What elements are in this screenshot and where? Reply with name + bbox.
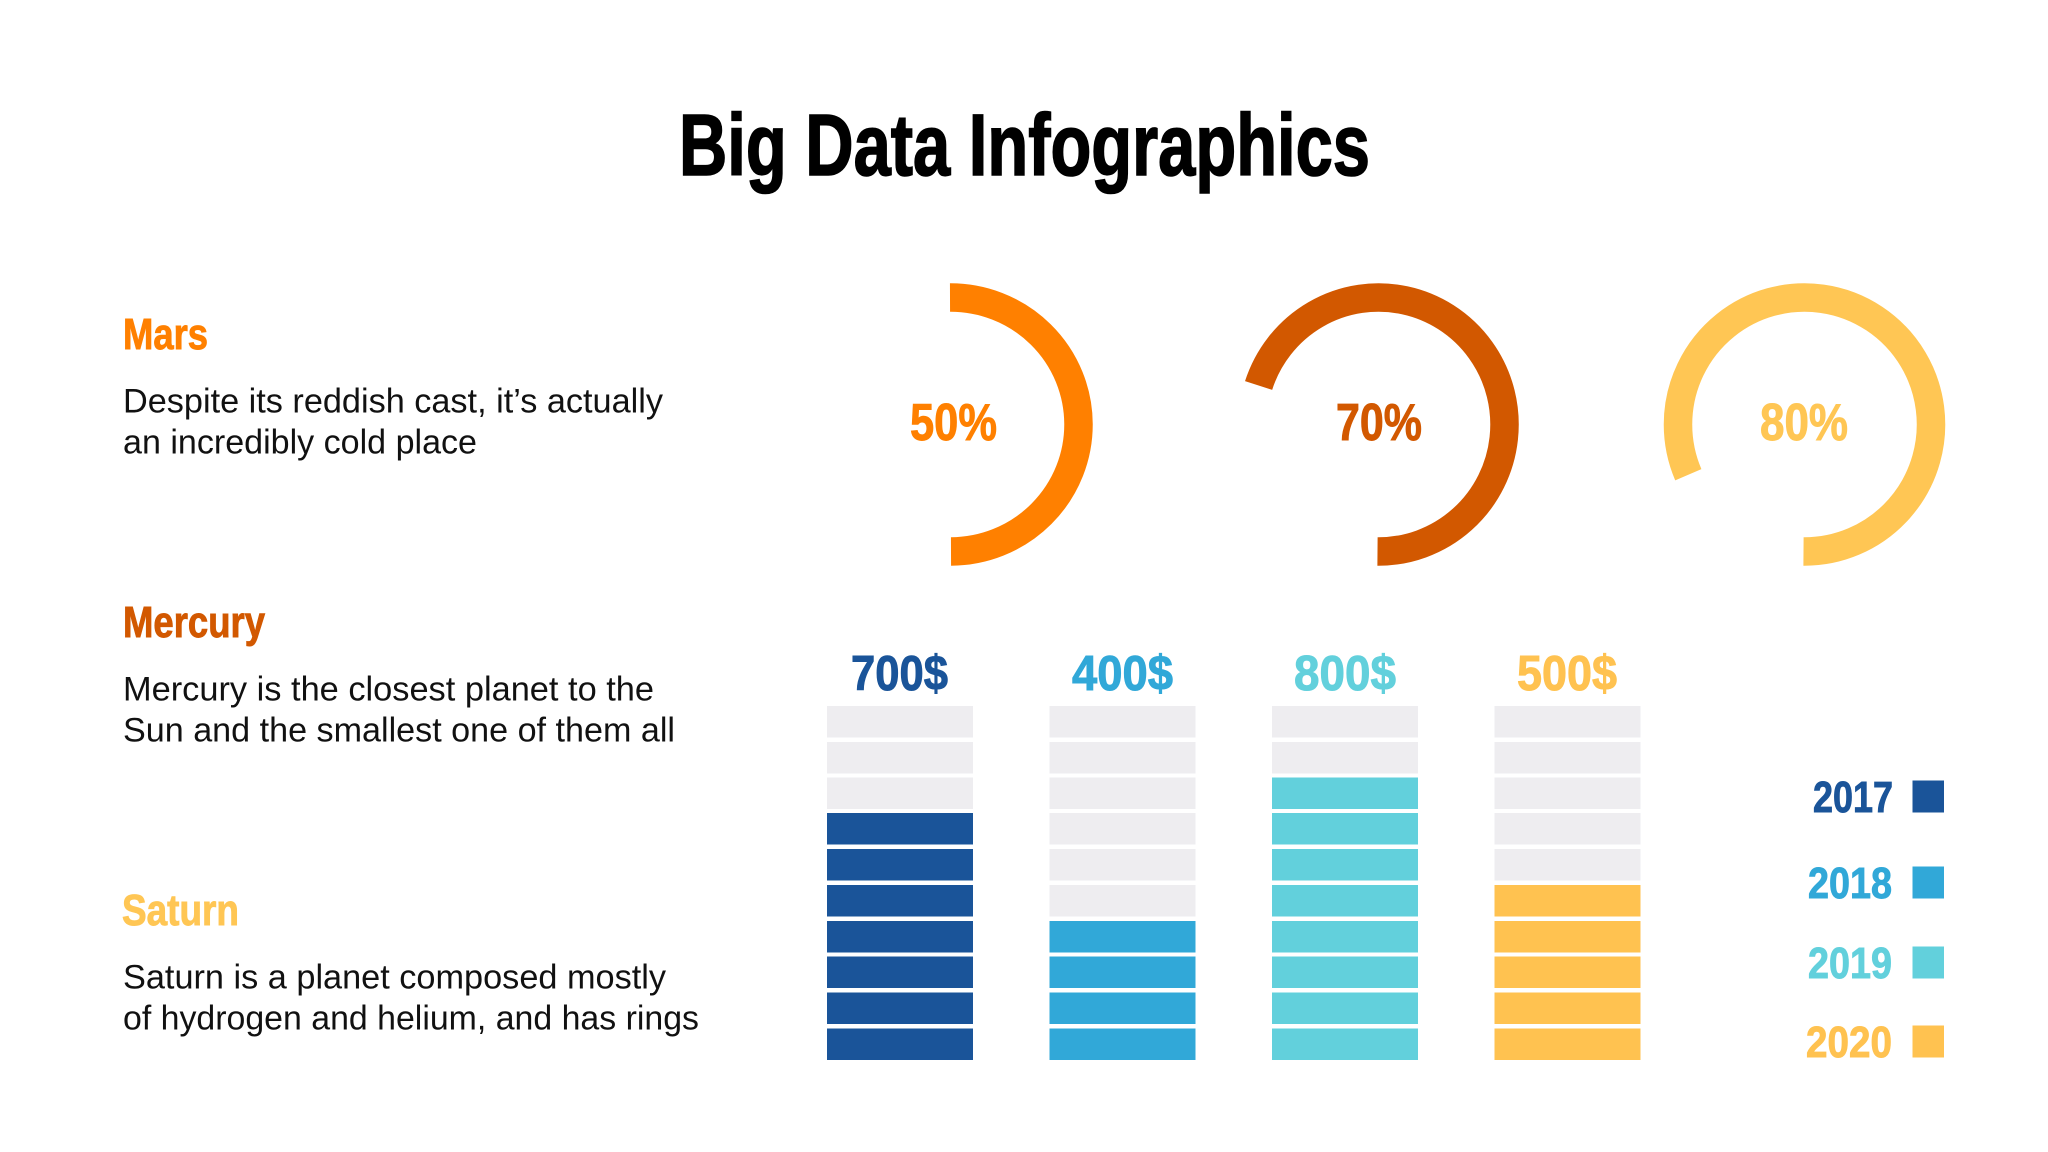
- heading: Saturn: Saturn: [122, 886, 239, 935]
- text block: Mars description: [123, 382, 663, 462]
- panel: Saturn text: [122, 886, 699, 1038]
- chart: Saturn 80% ring: [1678, 298, 1931, 552]
- text block: Mercury description: Mercury is the closest planet to the: [123, 670, 654, 708]
- bar chart: 2018 400$: [1050, 647, 1196, 1060]
- legend item: 2017: 2017: [1813, 773, 1893, 822]
- panel: Mars text: [123, 310, 663, 462]
- text block: Mars description: an incredibly cold place: [123, 424, 477, 462]
- chart: Mars 50% ring: [910, 297, 1079, 552]
- heading: Mercury: Mercury: [123, 598, 265, 647]
- bar chart: 2020 500$: [1494, 647, 1640, 1060]
- chart: Saturn 80% ring: 80%: [1760, 394, 1848, 452]
- heading: Mars: Mars: [123, 310, 208, 359]
- panel: Mercury text: [123, 598, 675, 750]
- legend item: 2020: 2020: [1806, 1018, 1892, 1067]
- text block: Mercury description: Sun and the smallest one of them all: [123, 712, 675, 750]
- text block: Mars description: Despite its reddish cast, it’s actually: [123, 382, 663, 420]
- legend: [1806, 773, 1944, 1067]
- bar chart: 2017 700$: 700$: [851, 647, 948, 701]
- text block: Mercury description: [123, 670, 675, 750]
- chart: Mars 50% ring: 50%: [910, 394, 997, 452]
- text block: Saturn description: of hydrogen and helium, and has rings: [123, 1000, 699, 1038]
- bar chart: 2019 800$: 800$: [1294, 647, 1396, 701]
- bar chart: 2020 500$: 500$: [1517, 647, 1617, 701]
- title: Big Data Infographics: [679, 97, 1370, 194]
- text block: Saturn description: Saturn is a planet composed mostly: [123, 958, 666, 996]
- legend item: 2018: 2018: [1808, 859, 1892, 908]
- chart: Mercury 70% ring: 70%: [1336, 394, 1422, 452]
- bar chart: 2019 800$: [1272, 647, 1418, 1060]
- bar chart: 2017 700$: [827, 647, 973, 1060]
- chart: Mercury 70% ring: [1259, 298, 1505, 552]
- bar chart: 2018 400$: 400$: [1072, 647, 1173, 701]
- text block: Saturn description: [123, 958, 699, 1038]
- legend item: 2019: 2019: [1808, 939, 1892, 988]
